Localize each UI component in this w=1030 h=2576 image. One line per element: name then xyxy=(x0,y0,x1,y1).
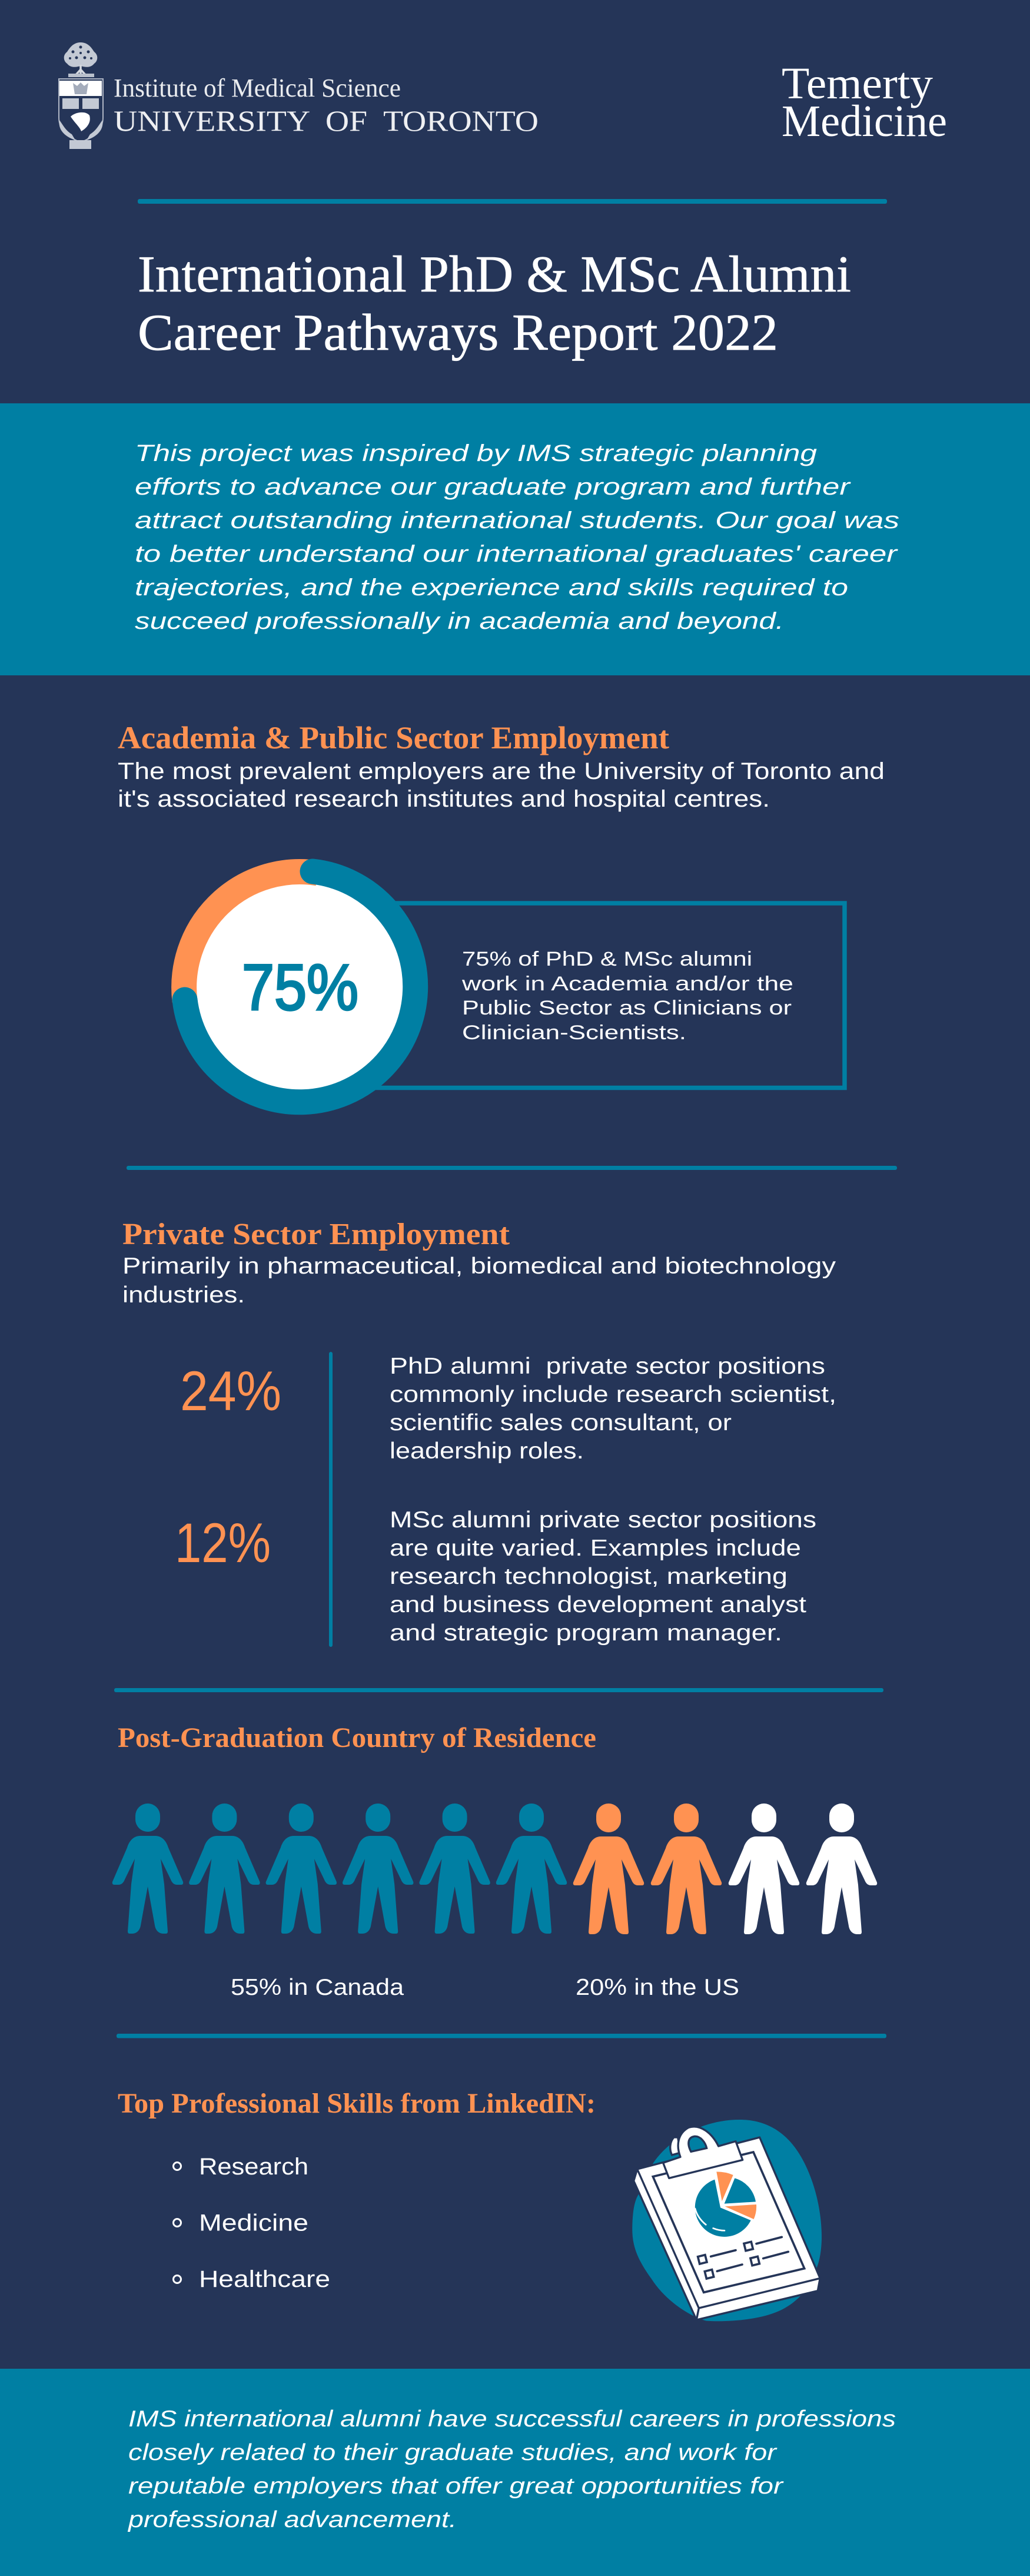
text block: PhD positions: commonly include research scientist, xyxy=(390,1382,836,1407)
stat: 12% MSc alumni xyxy=(175,1507,816,1646)
icon: teal person 5 xyxy=(419,1803,490,1934)
icon: teal person 4 xyxy=(343,1803,413,1934)
chart: 75% donut xyxy=(184,871,416,1103)
text block: project introduction: efforts to advance our graduate program and further xyxy=(135,474,851,500)
title: Career Pathways Report 2022 xyxy=(138,304,778,362)
text block: 75% description xyxy=(461,948,793,1044)
text block: MSc positions: are quite varied. Examples include xyxy=(390,1536,801,1561)
text block: private sector description: Primarily in pharmaceutical, biomedical and biotechnology xyxy=(122,1254,836,1279)
icon: white person 10 xyxy=(806,1803,877,1934)
text block: MSc positions: research technologist, marketing xyxy=(390,1564,788,1589)
logo: Temerty Medicine: Medicine xyxy=(782,97,947,146)
number: 75%: 75% xyxy=(242,952,358,1024)
text block: closing statement xyxy=(128,2406,896,2532)
heading: Private Sector Employment: Private Sector Employment xyxy=(122,1218,510,1251)
heading: Top Professional Skills from LinkedIN: Top Professional Skills from LinkedIN: xyxy=(118,2088,596,2119)
text block: academia description xyxy=(118,758,885,812)
icon: orange person 7 xyxy=(573,1803,644,1934)
text block: closing statement: IMS international alumni have successful careers in professions xyxy=(128,2406,896,2432)
number: 24%: 24% xyxy=(180,1360,281,1423)
text block: PhD positions xyxy=(390,1354,836,1464)
title: International PhD & MSc Alumni xyxy=(138,246,851,303)
text: University of Toronto: UNIVERSITY OF TORONTO xyxy=(114,104,539,137)
text block: private sector description: industries. xyxy=(122,1282,245,1308)
number: 12%: 12% xyxy=(175,1512,271,1574)
logo: Temerty Medicine: Temerty xyxy=(782,59,933,108)
list item: Medicine xyxy=(173,2210,308,2236)
text block: MSc positions xyxy=(390,1507,816,1646)
logo: Temerty Medicine xyxy=(782,59,947,146)
text block: MSc positions: MSc alumni private sector positions xyxy=(390,1507,816,1533)
icon: orange person 8 xyxy=(651,1803,722,1934)
text block: PhD positions: leadership roles. xyxy=(390,1438,584,1464)
icon: university crest xyxy=(59,42,103,149)
text block: 75% description: work in Academia and/or the xyxy=(461,973,793,995)
callout: 75% outlined box xyxy=(365,903,845,1088)
text block: closing statement: professional advancement. xyxy=(128,2507,457,2532)
icon: teal person 1 xyxy=(112,1803,183,1934)
icon: teal person 3 xyxy=(266,1803,337,1934)
text block: project introduction: trajectories, and the experience and skills required to xyxy=(135,575,848,601)
panel: closing band xyxy=(0,2369,1030,2576)
label: 55% in Canada: 55% in Canada xyxy=(231,1975,404,2000)
icon: clipboard with pie chart xyxy=(632,2120,822,2321)
text block: project introduction: to better understand our international graduates' career xyxy=(135,541,898,567)
text block: 75% description: Clinician-Scientists. xyxy=(462,1022,686,1044)
text block: academia description: it's associated research institutes and hospital centres. xyxy=(118,786,770,812)
list item: Research: Research xyxy=(199,2154,308,2180)
heading: Academia & Public Sector Employment: Academia & Public Sector Employment xyxy=(118,720,669,755)
list item: Healthcare: Healthcare xyxy=(199,2266,330,2292)
text: Institute of Medical Science: Institute of Medical Science xyxy=(114,74,401,102)
text block: 75% description: Public Sector as Clinicians or xyxy=(462,997,792,1019)
title xyxy=(138,246,851,362)
text block: project introduction: attract outstanding international students. Our goal was xyxy=(135,508,899,533)
text block: project introduction: succeed professionally in academia and beyond. xyxy=(135,608,784,634)
pictogram: ten people xyxy=(112,1803,877,1934)
text block: MSc positions: and business development analyst xyxy=(390,1592,806,1617)
text block: PhD positions: PhD alumni private sector positions xyxy=(390,1354,825,1379)
icon: white person 9 xyxy=(729,1803,799,1934)
icon: teal person 6 xyxy=(496,1803,567,1934)
text block: project introduction xyxy=(135,440,899,634)
stat: 24% PhD alumni xyxy=(180,1354,836,1464)
list: top skills xyxy=(173,2154,330,2292)
text block: academia description: The most prevalent employers are the University of Toronto and xyxy=(118,758,885,784)
icon: teal person 2 xyxy=(189,1803,260,1934)
text block: closing statement: closely related to their graduate studies, and work for xyxy=(128,2440,778,2465)
heading: Post-Graduation Country of Residence: Post-Graduation Country of Residence xyxy=(118,1722,596,1753)
text block: 75% description: 75% of PhD & MSc alumni xyxy=(462,948,752,970)
list item: Medicine: Medicine xyxy=(199,2210,308,2236)
logo: Institute of Medical Science, University of Toronto xyxy=(59,42,539,149)
label: 20% in the US: 20% in the US xyxy=(576,1975,739,2000)
text block: PhD positions: scientific sales consultant, or xyxy=(390,1410,732,1435)
text block: closing statement: reputable employers that offer great opportunities for xyxy=(128,2474,784,2499)
text block: MSc positions: and strategic program manager. xyxy=(390,1620,782,1646)
text block: private sector description xyxy=(122,1254,836,1308)
text block: project introduction: This project was inspired by IMS strategic planning xyxy=(135,440,817,466)
panel: intro band xyxy=(0,403,1030,675)
